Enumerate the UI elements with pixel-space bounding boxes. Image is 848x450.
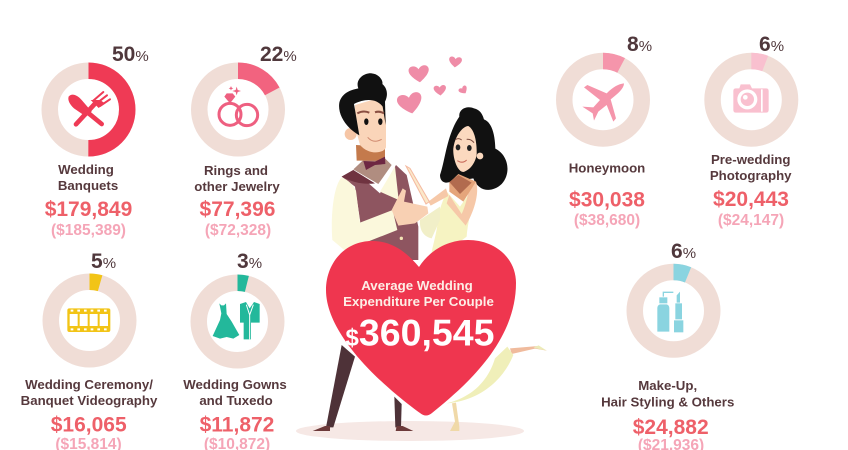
amount: $30,038 bbox=[569, 189, 645, 212]
label: and Tuxedo bbox=[199, 393, 273, 408]
sleeve bbox=[332, 177, 397, 251]
neck bbox=[356, 145, 385, 161]
icon: gown and tuxedo bbox=[213, 302, 260, 339]
woman dress bbox=[447, 347, 513, 403]
label: Pre-wedding bbox=[711, 152, 790, 167]
donut chart: 5% bbox=[51, 282, 128, 359]
panel: rings and jewelry bbox=[194, 43, 297, 239]
percentage: 22% bbox=[260, 43, 297, 66]
face bbox=[355, 97, 386, 152]
collar bbox=[353, 158, 392, 184]
panel: ceremony videography bbox=[21, 250, 158, 450]
total amount: $360,545 bbox=[346, 312, 494, 354]
icon: cosmetics bbox=[657, 292, 683, 332]
ear bbox=[477, 153, 483, 159]
panel: honeymoon bbox=[564, 33, 652, 229]
donut chart: 6% bbox=[713, 61, 790, 138]
label: Make-Up, bbox=[638, 378, 697, 393]
legs and dress hem bbox=[313, 345, 547, 431]
heart with total expenditure bbox=[326, 240, 516, 416]
man legs bbox=[326, 345, 355, 427]
previous amount: ($38,680) bbox=[574, 212, 640, 229]
previous amount: ($72,328) bbox=[205, 222, 271, 239]
ground shadow bbox=[296, 421, 524, 441]
amount: $16,065 bbox=[51, 414, 127, 436]
percentage: 50% bbox=[112, 43, 149, 66]
label: Wedding Gowns bbox=[183, 377, 287, 392]
label: Banquets bbox=[58, 178, 118, 193]
amount: $20,443 bbox=[713, 188, 789, 211]
label: Rings and bbox=[204, 163, 268, 178]
dress bbox=[430, 185, 475, 263]
icon: fork and knife bbox=[68, 92, 110, 124]
heart heading: Average Wedding bbox=[361, 278, 473, 293]
donut chart: 50% bbox=[50, 71, 127, 148]
hands bbox=[392, 188, 428, 226]
hair bbox=[440, 107, 507, 190]
icon: airplane bbox=[582, 83, 624, 122]
amount: $11,872 bbox=[200, 414, 274, 436]
eyes and mouth bbox=[456, 144, 460, 150]
brows eyes smile bbox=[357, 111, 384, 113]
hair bbox=[339, 73, 387, 135]
panel: make-up and hair styling bbox=[601, 240, 734, 450]
label: Wedding bbox=[58, 162, 114, 177]
icon: wedding rings bbox=[219, 86, 258, 126]
heart heading: Expenditure Per Couple bbox=[343, 294, 494, 309]
vest bbox=[342, 165, 418, 260]
woman raised leg bbox=[510, 346, 547, 354]
label: Hair Styling & Others bbox=[601, 394, 734, 410]
icon: film strip bbox=[67, 308, 110, 332]
amount: $24,882 bbox=[633, 416, 709, 439]
panel: wedding banquets bbox=[45, 43, 149, 239]
percentage: 3% bbox=[237, 250, 262, 273]
label: Honeymoon bbox=[569, 161, 645, 176]
man bbox=[332, 73, 429, 260]
donut chart: 6% bbox=[635, 272, 712, 350]
label: Wedding Ceremony/ bbox=[25, 377, 153, 392]
shirt front bbox=[380, 167, 399, 200]
icon: camera bbox=[733, 84, 769, 113]
amount: $179,849 bbox=[45, 198, 132, 221]
bow tie bbox=[363, 157, 385, 170]
label: Photography bbox=[710, 168, 792, 183]
arms bbox=[447, 182, 477, 226]
previous amount: ($185,389) bbox=[51, 222, 126, 239]
floating hearts bbox=[396, 56, 469, 116]
percentage: 6% bbox=[759, 33, 784, 56]
panel: pre-wedding photography bbox=[710, 33, 792, 229]
chest scarf bbox=[449, 174, 476, 202]
percentage: 6% bbox=[671, 240, 696, 263]
face bbox=[453, 126, 477, 172]
ear bbox=[345, 128, 357, 140]
donut chart: 8% bbox=[564, 61, 642, 138]
woman bbox=[420, 107, 507, 263]
label: other Jewelry bbox=[194, 179, 280, 194]
label: Banquet Videography bbox=[21, 393, 158, 408]
donut chart: 22% bbox=[199, 71, 277, 148]
woman standing leg bbox=[450, 403, 459, 431]
percentage: 5% bbox=[91, 250, 116, 273]
amount: $77,396 bbox=[200, 198, 275, 221]
button bbox=[400, 237, 403, 240]
illustration: couple behind heart bbox=[296, 56, 547, 441]
previous amount: ($24,147) bbox=[718, 212, 784, 229]
percentage: 8% bbox=[627, 33, 652, 56]
heart shape bbox=[326, 240, 516, 416]
donut chart: 3% bbox=[199, 283, 276, 360]
panel: gowns and tuxedo bbox=[183, 250, 287, 450]
